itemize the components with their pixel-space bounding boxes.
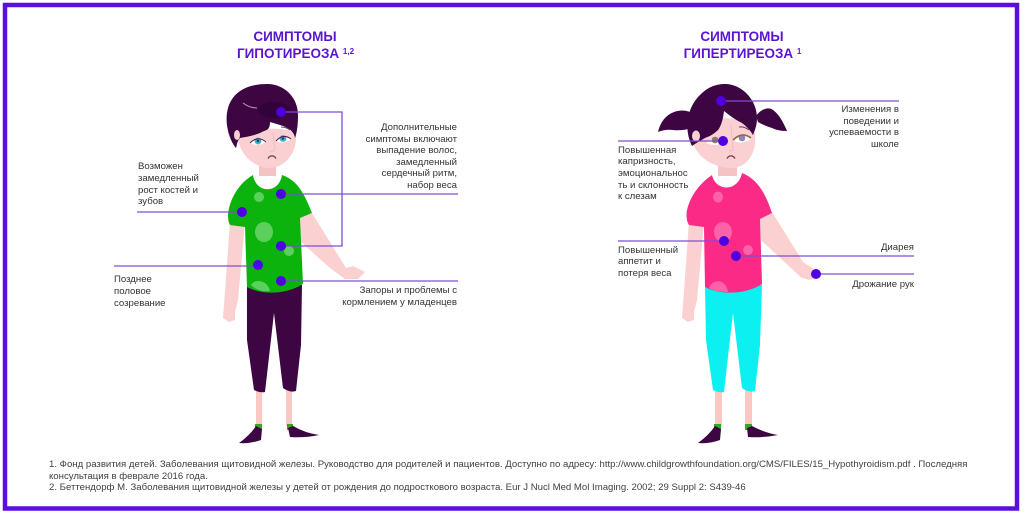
left arm <box>223 222 245 322</box>
eyes <box>706 135 751 145</box>
face <box>238 129 296 168</box>
text: tremor: Дрожание рук <box>852 279 915 290</box>
nose shade <box>729 125 733 151</box>
text: late puberty: половое <box>114 286 151 297</box>
illustration: boy <box>223 84 365 443</box>
text: late puberty: созревание <box>114 298 166 309</box>
callout line: diarrhea <box>736 255 914 257</box>
heading: hyperthyroidism symptoms: ГИПЕРТИРЕОЗА <box>684 46 793 61</box>
text: behaviour changes: успеваемости в <box>829 127 899 138</box>
callouts: hypothyroidism <box>114 107 458 286</box>
text: slowed bone growth: рост костей и <box>138 185 198 196</box>
text: slowed bone growth: зубов <box>138 196 163 207</box>
mouth <box>268 156 276 158</box>
left pigtail <box>658 110 692 132</box>
callouts: hyperthyroidism <box>618 96 914 279</box>
text: appetite: потеря веса <box>618 268 672 279</box>
text: late puberty: Позднее <box>114 274 152 285</box>
text: moodiness: Повышенная <box>618 145 676 156</box>
heading: hypothyroidism symptoms: СИМПТОМЫ <box>253 29 337 44</box>
marker dots <box>716 96 821 279</box>
text: behaviour changes: школе <box>871 139 899 150</box>
text: diarrhea: Диарея <box>881 242 914 253</box>
eyebrow <box>281 127 290 130</box>
hair <box>687 84 757 146</box>
text: behaviour changes: Изменения в <box>842 104 899 115</box>
right arm <box>760 212 818 280</box>
footnotes: консультация в феврале 2016 года. <box>49 471 208 482</box>
text: slowed bone growth: замедленный <box>138 173 199 184</box>
callout line: tremor <box>816 273 914 275</box>
neck <box>259 158 276 176</box>
connector: additional symptoms bracket <box>281 112 342 246</box>
text: appetite: Повышенный <box>618 245 678 256</box>
shoes <box>239 426 319 443</box>
heading: hyperthyroidism symptoms <box>684 29 802 61</box>
footnotes: 1. Фонд развития детей. Заболевания щитовидной железы. Руководство для родителей и пациентов. Доступно по адресу: http://www.childgrowthfoundation.org/CMS/FILES/15_Hypothyroidism.pdf . Последняя <box>49 459 967 470</box>
callout line: bones <box>137 211 242 213</box>
trousers <box>247 285 302 392</box>
text: additional symptoms: набор веса <box>407 180 458 191</box>
t-shirt <box>228 175 312 293</box>
face <box>692 118 755 168</box>
ear <box>692 130 700 142</box>
callout line: constipation <box>281 280 458 282</box>
heading: hypothyroidism symptoms: 1,2 <box>343 47 355 56</box>
hair <box>227 84 298 148</box>
text: slowed bone growth: Возможен <box>138 161 183 172</box>
text: moodiness: капризность, <box>618 156 676 167</box>
text: constipation: Запоры и проблемы с <box>360 285 457 296</box>
callout line: additional symptoms <box>281 193 458 195</box>
mouth <box>727 156 735 158</box>
legs <box>256 388 292 426</box>
heading: hypothyroidism symptoms: ГИПОТИРЕОЗА <box>237 46 339 61</box>
eyebrow <box>739 127 749 130</box>
illustration: girl <box>658 84 818 443</box>
nose shade <box>270 132 275 152</box>
callout line: behaviour <box>721 100 899 102</box>
text: appetite: аппетит и <box>618 256 661 267</box>
left arm <box>682 222 704 322</box>
text: additional symptoms: замедленный <box>396 157 457 168</box>
text: moodiness: ть и склонность <box>618 180 688 191</box>
callout line: appetite <box>618 240 724 242</box>
ear <box>234 130 240 140</box>
trousers <box>705 285 762 392</box>
heading: hyperthyroidism symptoms: СИМПТОМЫ <box>700 29 784 44</box>
right pigtail <box>756 108 787 131</box>
shoes <box>698 426 778 443</box>
text: moodiness: эмоциональнос <box>618 168 688 179</box>
hair highlight <box>243 103 257 108</box>
text: additional symptoms: выпадение волос, <box>376 145 457 156</box>
heading: hypothyroidism symptoms <box>237 29 355 61</box>
shirt spots <box>709 192 753 292</box>
neck <box>718 158 737 176</box>
eyes <box>250 135 291 145</box>
callout line: moodiness <box>618 140 723 142</box>
text: behaviour changes: поведении и <box>843 116 899 127</box>
text: moodiness: к слезам <box>618 191 657 202</box>
text: additional symptoms: сердечный ритм, <box>382 168 457 179</box>
heading: hyperthyroidism symptoms: 1 <box>797 47 802 56</box>
text: additional symptoms: симптомы включают <box>366 134 458 145</box>
text: additional symptoms: Дополнительные <box>381 122 457 133</box>
right arm <box>300 213 365 279</box>
socks <box>255 424 293 430</box>
t-shirt <box>687 173 772 293</box>
socks <box>714 424 752 430</box>
hair shade <box>258 102 290 118</box>
marker dots <box>237 107 286 286</box>
text: constipation: кормлением у младенцев <box>342 297 457 308</box>
legs <box>715 388 752 426</box>
footnotes: 2. Беттендорф М. Заболевания щитовидной железы у детей от рождения до подросткового возраста. Eur J Nucl Med Mol Imaging. 2002; 29 Suppl 2: S439-46 <box>49 482 746 493</box>
callout line: puberty <box>114 265 258 267</box>
shirt spots <box>251 192 294 291</box>
